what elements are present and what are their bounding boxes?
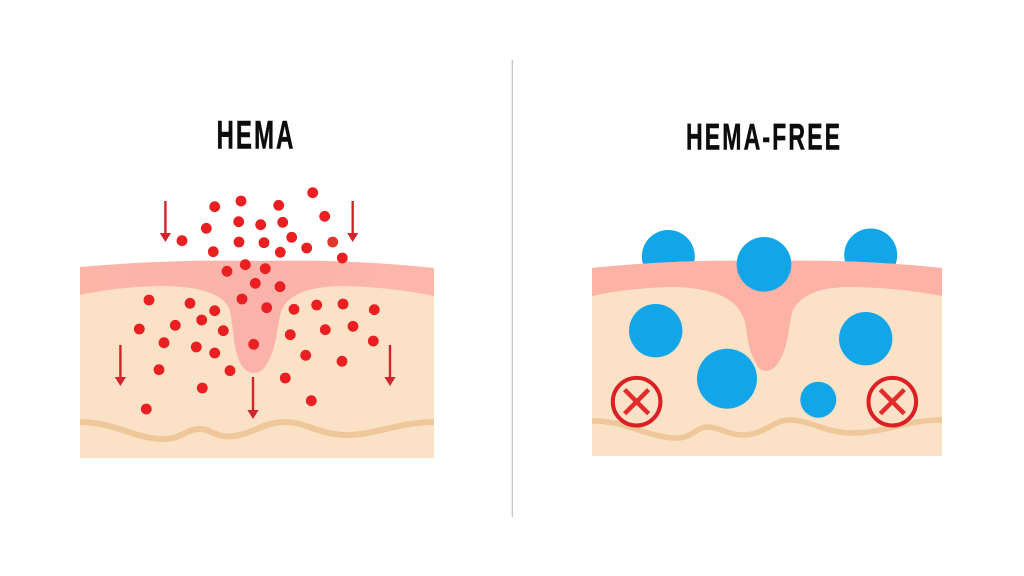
skin epidermis layer with pore bbox=[592, 261, 942, 371]
panel: HEMA-FREE skin diagram bbox=[592, 228, 942, 456]
title: HEMA-FREE: HEMA-FREE bbox=[686, 116, 842, 158]
skin dermis layer bbox=[80, 261, 434, 458]
title: HEMA: HEMA bbox=[216, 112, 295, 157]
skin dermis layer bbox=[592, 261, 942, 456]
blue HEMA-free molecules bbox=[629, 237, 892, 418]
blue molecules behind the surface bbox=[642, 228, 897, 283]
red HEMA particles bbox=[134, 187, 380, 414]
skin epidermis layer with pore bbox=[80, 261, 434, 373]
divider bbox=[512, 60, 513, 517]
panel: HEMA skin diagram bbox=[80, 187, 434, 458]
icon: red cross left bbox=[613, 378, 660, 426]
wavy basal line bbox=[80, 422, 434, 439]
icon: red cross right bbox=[868, 378, 916, 426]
arrows: penetration direction bbox=[115, 201, 396, 419]
wavy basal line bbox=[592, 420, 942, 438]
